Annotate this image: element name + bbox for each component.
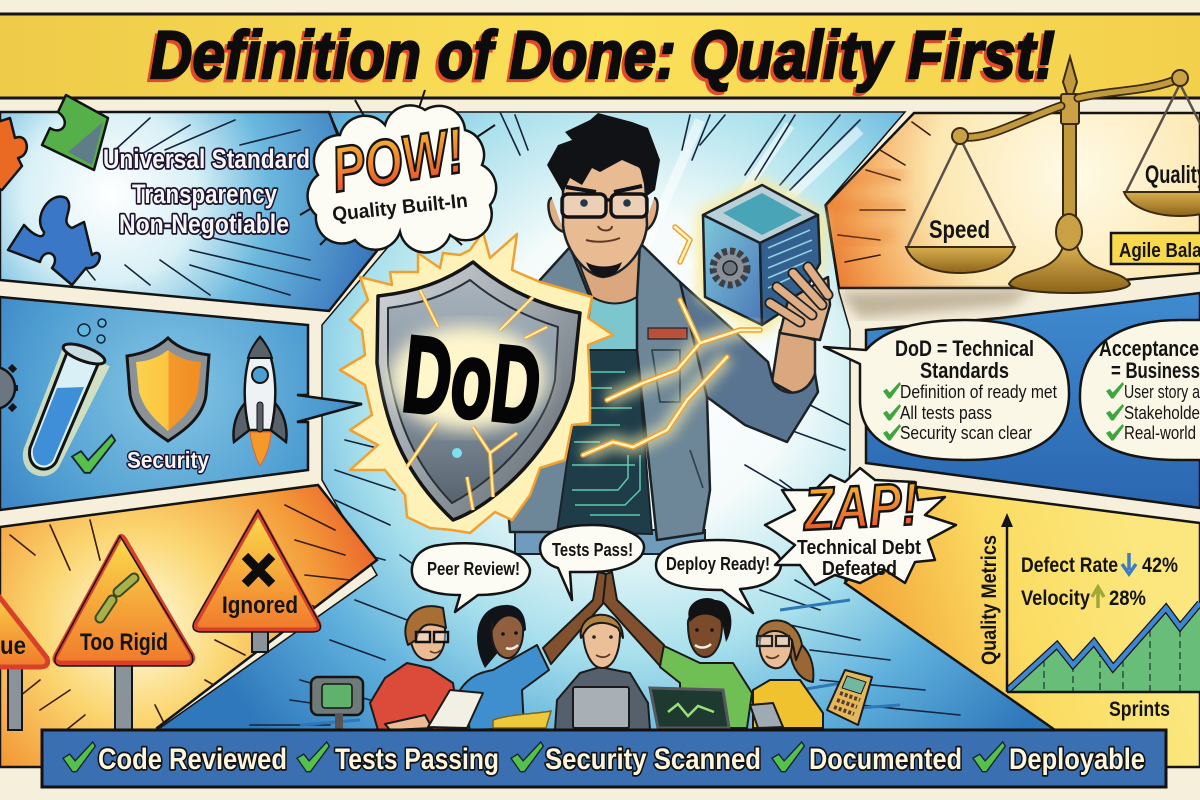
sleeve [680, 282, 818, 442]
text: universal standard list [103, 144, 310, 239]
person: red shirt [370, 606, 460, 730]
neck [572, 245, 640, 304]
icon: DoD shield with energy burst [340, 232, 613, 533]
character: developer hero [505, 113, 830, 554]
chart: area and line [1001, 513, 1200, 692]
sign: ignored [193, 510, 320, 652]
axis label: quality metrics: Quality Metrics [978, 535, 1001, 665]
sticker: ZAP technical debt defeated [765, 468, 956, 585]
lightning bolts [583, 227, 760, 455]
speech bubble: deploy ready [656, 540, 781, 613]
circuit tee print [557, 350, 652, 534]
person: grey shirt with tablet [555, 615, 650, 730]
sticker: POW quality built-in [300, 90, 496, 253]
stat: velocity: 28% [1109, 587, 1146, 610]
finial [1063, 57, 1077, 94]
forearm [772, 330, 815, 397]
jacket pocket and badge [648, 328, 703, 488]
stat: defect rate: 42% [1142, 554, 1178, 577]
label: speed: Speed [929, 216, 990, 244]
brows [566, 186, 642, 192]
item: tests passing [297, 742, 499, 776]
shield text: DoD [398, 313, 546, 447]
text: ZAP: ZAP! [801, 470, 920, 543]
icon: gear on cube [713, 251, 747, 285]
shadow [838, 288, 1035, 318]
icon: balance scale [906, 57, 1200, 293]
beam [960, 78, 1180, 137]
callout: acceptance criteria business [1080, 320, 1200, 460]
panel: DoD versus acceptance criteria [824, 293, 1200, 508]
speed lines [75, 118, 320, 295]
person: blue shirt raising hand [460, 572, 606, 730]
icon: test tube [26, 319, 107, 473]
sign: ignored: Ignored [222, 592, 298, 619]
icon: gear [0, 366, 18, 410]
icon: security shield [127, 338, 209, 441]
title: Definition of Done: Quality First! [150, 17, 1055, 93]
right pan [1124, 192, 1200, 216]
text: quality built-in: Quality Built-In [331, 190, 469, 226]
item: deployable [973, 742, 1145, 776]
left pan [906, 247, 1015, 273]
callout: DoD technical standards: Definition of ready met [900, 382, 1057, 402]
panel: quality metrics chart [845, 487, 1200, 767]
callout: DoD technical standards: Standards [920, 358, 1009, 383]
callout: DoD technical standards [824, 320, 1069, 460]
speech bubble: tests pass: Tests Pass! [552, 540, 633, 560]
stat: defect rate: Defect Rate [1021, 554, 1118, 577]
text: universal standard list: Transparency [132, 179, 277, 209]
label: security: Security [127, 447, 209, 473]
shield inner [388, 280, 558, 503]
sign: vague [0, 585, 48, 730]
yellow papers [493, 711, 551, 728]
shield lightning cracks [407, 290, 547, 510]
hand gripping cube [770, 267, 830, 340]
gadget: monitor device [311, 677, 363, 730]
icon: broken chain [100, 578, 134, 618]
sticker: ZAP technical debt defeated: Defeated [822, 558, 897, 580]
item: deployable: Deployable [1009, 743, 1145, 776]
icon: orange puzzle piece [0, 118, 27, 190]
text: universal standard list: Non-Negotiable [119, 209, 289, 239]
label: agile balance [1111, 233, 1200, 264]
sign: vague: ue [0, 632, 26, 660]
sign: too rigid: Too Rigid [80, 629, 168, 656]
icon: rocket [234, 337, 286, 466]
axis label: sprints: Sprints [1109, 698, 1170, 721]
trousers [515, 530, 705, 554]
speech bubble: tests pass [540, 525, 644, 600]
panel: universal standard [0, 95, 380, 311]
panel: quality gates icons [0, 297, 362, 510]
person: yellow shirt [750, 620, 823, 728]
speech bubble: deploy ready: Deploy Ready! [666, 554, 770, 574]
text: POW: POW! [327, 114, 469, 206]
speech bubble: peer review [412, 543, 530, 612]
hair [547, 113, 660, 196]
item: documented [772, 742, 962, 776]
glow behind letters [390, 326, 546, 430]
item: code reviewed: Code Reviewed [98, 743, 287, 776]
sign: too rigid [55, 536, 193, 730]
item: security scanned: Security Scanned [545, 743, 761, 776]
speed lines [838, 122, 930, 262]
gadget: calculator [827, 670, 872, 725]
notepad [428, 690, 483, 728]
speed lines [10, 505, 350, 735]
head [547, 113, 660, 277]
shield body [377, 262, 580, 520]
beard shadow [586, 262, 622, 277]
person: green shirt raising hand [603, 572, 752, 728]
panel: speed versus quality balance [825, 57, 1200, 318]
base [1009, 246, 1130, 293]
icon: black x [245, 556, 272, 584]
jacket left front [505, 247, 592, 532]
icon: green check [72, 435, 115, 473]
text: technical debt defeated: Technical Debt [797, 537, 921, 559]
icon: glowing data cube [697, 178, 826, 335]
team: people celebrating [311, 572, 872, 730]
energy burst [340, 232, 613, 533]
post [1063, 122, 1076, 247]
burst lines [300, 90, 495, 245]
callout: DoD technical standards: All tests pass [900, 403, 992, 423]
stat: velocity [1021, 587, 1146, 610]
text: universal standard list: Universal Standard [103, 144, 310, 174]
item: tests passing: Tests Passing [335, 743, 499, 776]
t-shirt [583, 297, 637, 352]
checklist banner [42, 730, 1166, 787]
nose and mouth [586, 226, 620, 242]
icon: green puzzle piece [42, 95, 108, 170]
title banner [0, 14, 1200, 98]
core light [452, 448, 462, 458]
item: documented: Documented [809, 743, 962, 776]
panel: centre hero background [157, 112, 1055, 730]
callout: DoD technical standards: Security scan clear [900, 423, 1032, 443]
icon: blue puzzle piece [8, 197, 100, 285]
stat: velocity: Velocity [1021, 587, 1090, 610]
callout: DoD technical standards: DoD = Technical [895, 336, 1034, 361]
speech bubble: peer review: Peer Review! [427, 559, 520, 579]
panel: common pitfalls warning signs [0, 485, 377, 767]
jacket right front [637, 243, 720, 540]
glasses [562, 194, 647, 217]
